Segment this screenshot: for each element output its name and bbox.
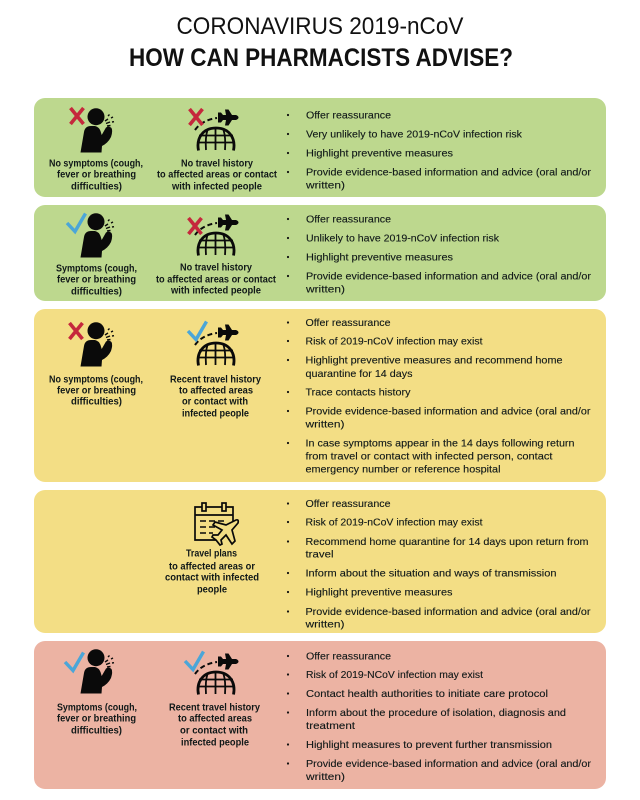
advice list: Provide evidence-based information and advice (oral and/or	[306, 166, 592, 178]
label: no travel history: No travel history	[180, 262, 252, 274]
advice list: written)	[305, 180, 345, 192]
advice list: Provide evidence-based information and advice (oral and/or	[306, 270, 592, 282]
advice list: Offer reassurance	[306, 214, 391, 226]
label: no travel history	[156, 262, 277, 296]
advice list: Offer reassurance	[306, 110, 391, 122]
advice list: Highlight preventive measures and recommend home	[306, 354, 563, 366]
label: no symptoms: No symptoms (cough,	[49, 374, 143, 386]
label: no travel history	[157, 158, 278, 192]
label: no symptoms: difficulties)	[71, 182, 122, 192]
label: symptoms: difficulties)	[71, 286, 122, 298]
advice list	[287, 650, 592, 783]
advice list: Provide evidence-based information and advice (oral and/or	[306, 606, 591, 618]
advice list: Highlight preventive measures	[306, 586, 452, 598]
label: symptoms: difficulties)	[71, 726, 122, 736]
advice list: written)	[304, 418, 344, 430]
advice list: Highlight preventive measures	[306, 252, 453, 264]
label: no symptoms: fever or breathing	[57, 170, 136, 180]
advice list: Inform about the situation and ways of transmission	[306, 568, 557, 580]
advice list: written)	[304, 618, 344, 630]
icon: globe and plane with red cross	[190, 109, 238, 150]
advice list	[287, 498, 591, 630]
icon: person coughing with blue check	[67, 213, 114, 258]
advice list: treatment	[306, 720, 355, 732]
advice list: Offer reassurance	[306, 317, 391, 329]
advice list: Contact health authorities to initiate care protocol	[306, 688, 548, 700]
label: no travel history: No travel history	[181, 158, 253, 170]
label: recent travel history: or contact with	[182, 396, 248, 408]
panel: travel plans	[34, 490, 606, 633]
label: symptoms	[57, 702, 137, 736]
title	[129, 13, 513, 72]
label: no travel history: to affected areas or contact	[156, 274, 277, 286]
advice list: Risk of 2019-nCoV infection may exist	[306, 516, 483, 528]
panel: no symptoms, no travel history	[34, 98, 606, 197]
label: symptoms: fever or breathing	[57, 714, 136, 724]
advice list: Offer reassurance	[306, 498, 391, 510]
label: recent travel history	[169, 702, 260, 748]
advice list: Highlight preventive measures	[306, 148, 453, 160]
label: symptoms: Symptoms (cough,	[57, 702, 137, 714]
advice list	[287, 214, 592, 296]
label: travel plans: to affected areas or	[169, 562, 255, 572]
label: travel plans: people	[197, 584, 227, 596]
label: recent travel history: Recent travel history	[169, 702, 260, 714]
label: no travel history: with infected people	[171, 182, 262, 192]
advice list: travel	[306, 548, 334, 560]
title: CORONAVIRUS 2019-nCoV	[176, 13, 464, 40]
label: recent travel history: to affected areas	[179, 386, 253, 396]
label: no symptoms	[49, 158, 143, 192]
label: no symptoms: difficulties)	[71, 396, 122, 408]
advice list: emergency number or reference hospital	[306, 464, 500, 476]
label: travel plans: contact with infected	[165, 572, 259, 584]
label: recent travel history	[170, 374, 261, 420]
advice list: quarantine for 14 days	[306, 368, 412, 380]
label: no symptoms: fever or breathing	[57, 386, 136, 396]
advice list: written)	[305, 771, 345, 783]
label: symptoms	[56, 264, 137, 298]
title: HOW CAN PHARMACISTS ADVISE?	[129, 44, 513, 72]
advice list: Risk of 2019-NCoV infection may exist	[306, 669, 483, 681]
advice list	[287, 317, 591, 476]
advice list	[287, 110, 592, 192]
label: recent travel history: infected people	[182, 408, 249, 420]
label: no symptoms: No symptoms (cough,	[49, 158, 143, 170]
advice list: Trace contacts history	[306, 386, 411, 398]
advice list: Provide evidence-based information and advice (oral and/or	[306, 758, 592, 770]
icon: person coughing with red cross	[70, 322, 114, 366]
label: recent travel history: Recent travel history	[170, 374, 261, 386]
advice list: Unlikely to have 2019-nCoV infection risk	[306, 232, 500, 244]
panel: symptoms, no travel history	[34, 205, 606, 301]
advice list: Offer reassurance	[306, 650, 391, 662]
advice list: Recommend home quarantine for 14 days upon return from	[306, 536, 589, 548]
label: symptoms: fever or breathing	[57, 274, 136, 286]
label: recent travel history: infected people	[181, 738, 249, 748]
advice list: Very unlikely to have 2019-nCoV infection risk	[306, 128, 523, 140]
icon: person coughing with blue check	[65, 649, 114, 694]
label: no travel history: to affected areas or contact	[157, 170, 278, 180]
label: travel plans	[165, 548, 259, 596]
panel: no symptoms, recent travel history	[34, 309, 606, 482]
label: recent travel history: or contact with	[180, 726, 248, 736]
advice list: Highlight measures to prevent further transmission	[306, 739, 552, 751]
icon: globe and plane with blue check	[185, 652, 238, 694]
label: travel plans: Travel plans	[186, 548, 237, 560]
icon: calendar with plane	[195, 503, 238, 545]
label: recent travel history: to affected areas	[178, 714, 252, 724]
icon: person coughing with red cross	[70, 108, 114, 152]
advice list: from travel or contact with infected person, contact	[306, 450, 553, 462]
advice list: Provide evidence-based information and advice (oral and/or	[306, 406, 591, 418]
advice list: In case symptoms appear in the 14 days following return	[306, 438, 575, 450]
icon: globe and plane with red cross	[188, 214, 238, 256]
advice list: written)	[305, 284, 345, 296]
label: no travel history: with infected people	[170, 286, 261, 296]
panel: symptoms and recent travel history	[34, 641, 606, 789]
advice list: Inform about the procedure of isolation, diagnosis and	[306, 707, 566, 719]
icon: globe and plane with blue check	[188, 322, 238, 366]
label: symptoms: Symptoms (cough,	[56, 264, 137, 274]
label: no symptoms	[49, 374, 143, 408]
advice list: Risk of 2019-nCoV infection may exist	[306, 336, 483, 348]
